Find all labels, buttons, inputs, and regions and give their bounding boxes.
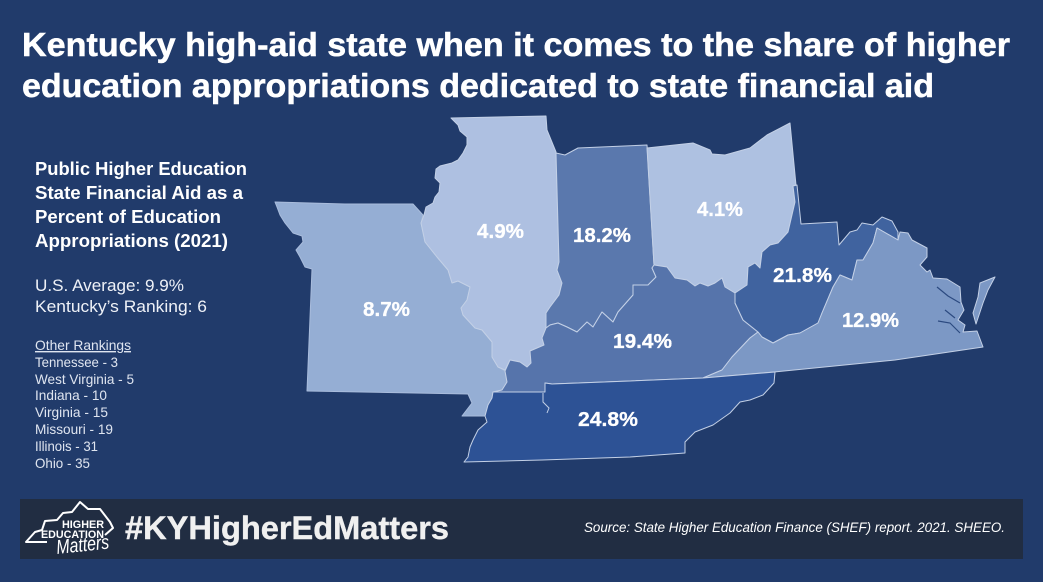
map value labels: 18.2% bbox=[573, 225, 631, 247]
map value labels: 19.4% bbox=[613, 331, 672, 353]
other rankings list: Tennessee - 3 bbox=[35, 354, 118, 370]
map value labels: 12.9% bbox=[842, 310, 899, 332]
footer bar bbox=[20, 499, 1023, 559]
other rankings list: West Virginia - 5 bbox=[35, 371, 134, 387]
state: Kentucky bbox=[493, 265, 758, 392]
map value labels: 21.8% bbox=[773, 265, 832, 287]
map value labels: 8.7% bbox=[363, 299, 410, 321]
sidebar heading: Public Higher Education bbox=[35, 159, 247, 179]
title: Kentucky high-aid state when it comes to the share of higher bbox=[22, 26, 1010, 63]
state: Illinois bbox=[421, 116, 562, 370]
state: West Virginia bbox=[735, 185, 898, 343]
title bbox=[22, 26, 1010, 104]
logo: Higher Education Matters bbox=[26, 502, 113, 559]
state: Virginia bbox=[703, 228, 983, 378]
logo: Higher Education Matters: HIGHER bbox=[62, 519, 104, 531]
other rankings list: Illinois - 31 bbox=[35, 438, 98, 454]
other rankings list bbox=[35, 337, 134, 471]
state: Ohio bbox=[647, 123, 796, 293]
other rankings list: Missouri - 19 bbox=[35, 421, 113, 437]
Virginia eastern shore bbox=[973, 277, 995, 324]
U.S. average and Kentucky ranking: Kentucky’s Ranking: 6 bbox=[35, 297, 207, 316]
logo: Higher Education Matters: EDUCATION bbox=[41, 529, 104, 541]
sidebar heading bbox=[35, 159, 247, 251]
Tennessee river and Chesapeake inlets bbox=[543, 287, 960, 413]
sidebar heading: Percent of Education bbox=[35, 207, 221, 227]
state: Missouri bbox=[275, 202, 507, 416]
map value labels: 4.9% bbox=[477, 221, 524, 243]
map value labels bbox=[363, 199, 899, 431]
U.S. average and Kentucky ranking bbox=[35, 276, 207, 316]
other rankings list: Other Rankings bbox=[35, 337, 131, 353]
state: Indiana bbox=[546, 145, 656, 332]
other rankings list: Virginia - 15 bbox=[35, 404, 108, 420]
sidebar heading: State Financial Aid as a bbox=[35, 183, 244, 203]
state: Tennessee bbox=[464, 372, 775, 462]
hashtag: #KYHigherEdMatters bbox=[125, 510, 449, 546]
source note: Source: State Higher Education Finance (SHEF) report. 2021. SHEEO. bbox=[584, 519, 1005, 535]
sidebar heading: Appropriations (2021) bbox=[35, 231, 228, 251]
map of states bbox=[275, 116, 995, 462]
other rankings list: Indiana - 10 bbox=[35, 387, 107, 403]
sidebar: key figures and rankings bbox=[35, 159, 247, 471]
map value labels: 4.1% bbox=[697, 199, 743, 221]
other rankings list: Ohio - 35 bbox=[35, 455, 90, 471]
logo: Higher Education Matters: Matters bbox=[55, 532, 110, 559]
map value labels: 24.8% bbox=[578, 409, 638, 431]
title: education appropriations dedicated to state financial aid bbox=[22, 67, 934, 104]
U.S. average and Kentucky ranking: U.S. Average: 9.9% bbox=[35, 276, 184, 295]
